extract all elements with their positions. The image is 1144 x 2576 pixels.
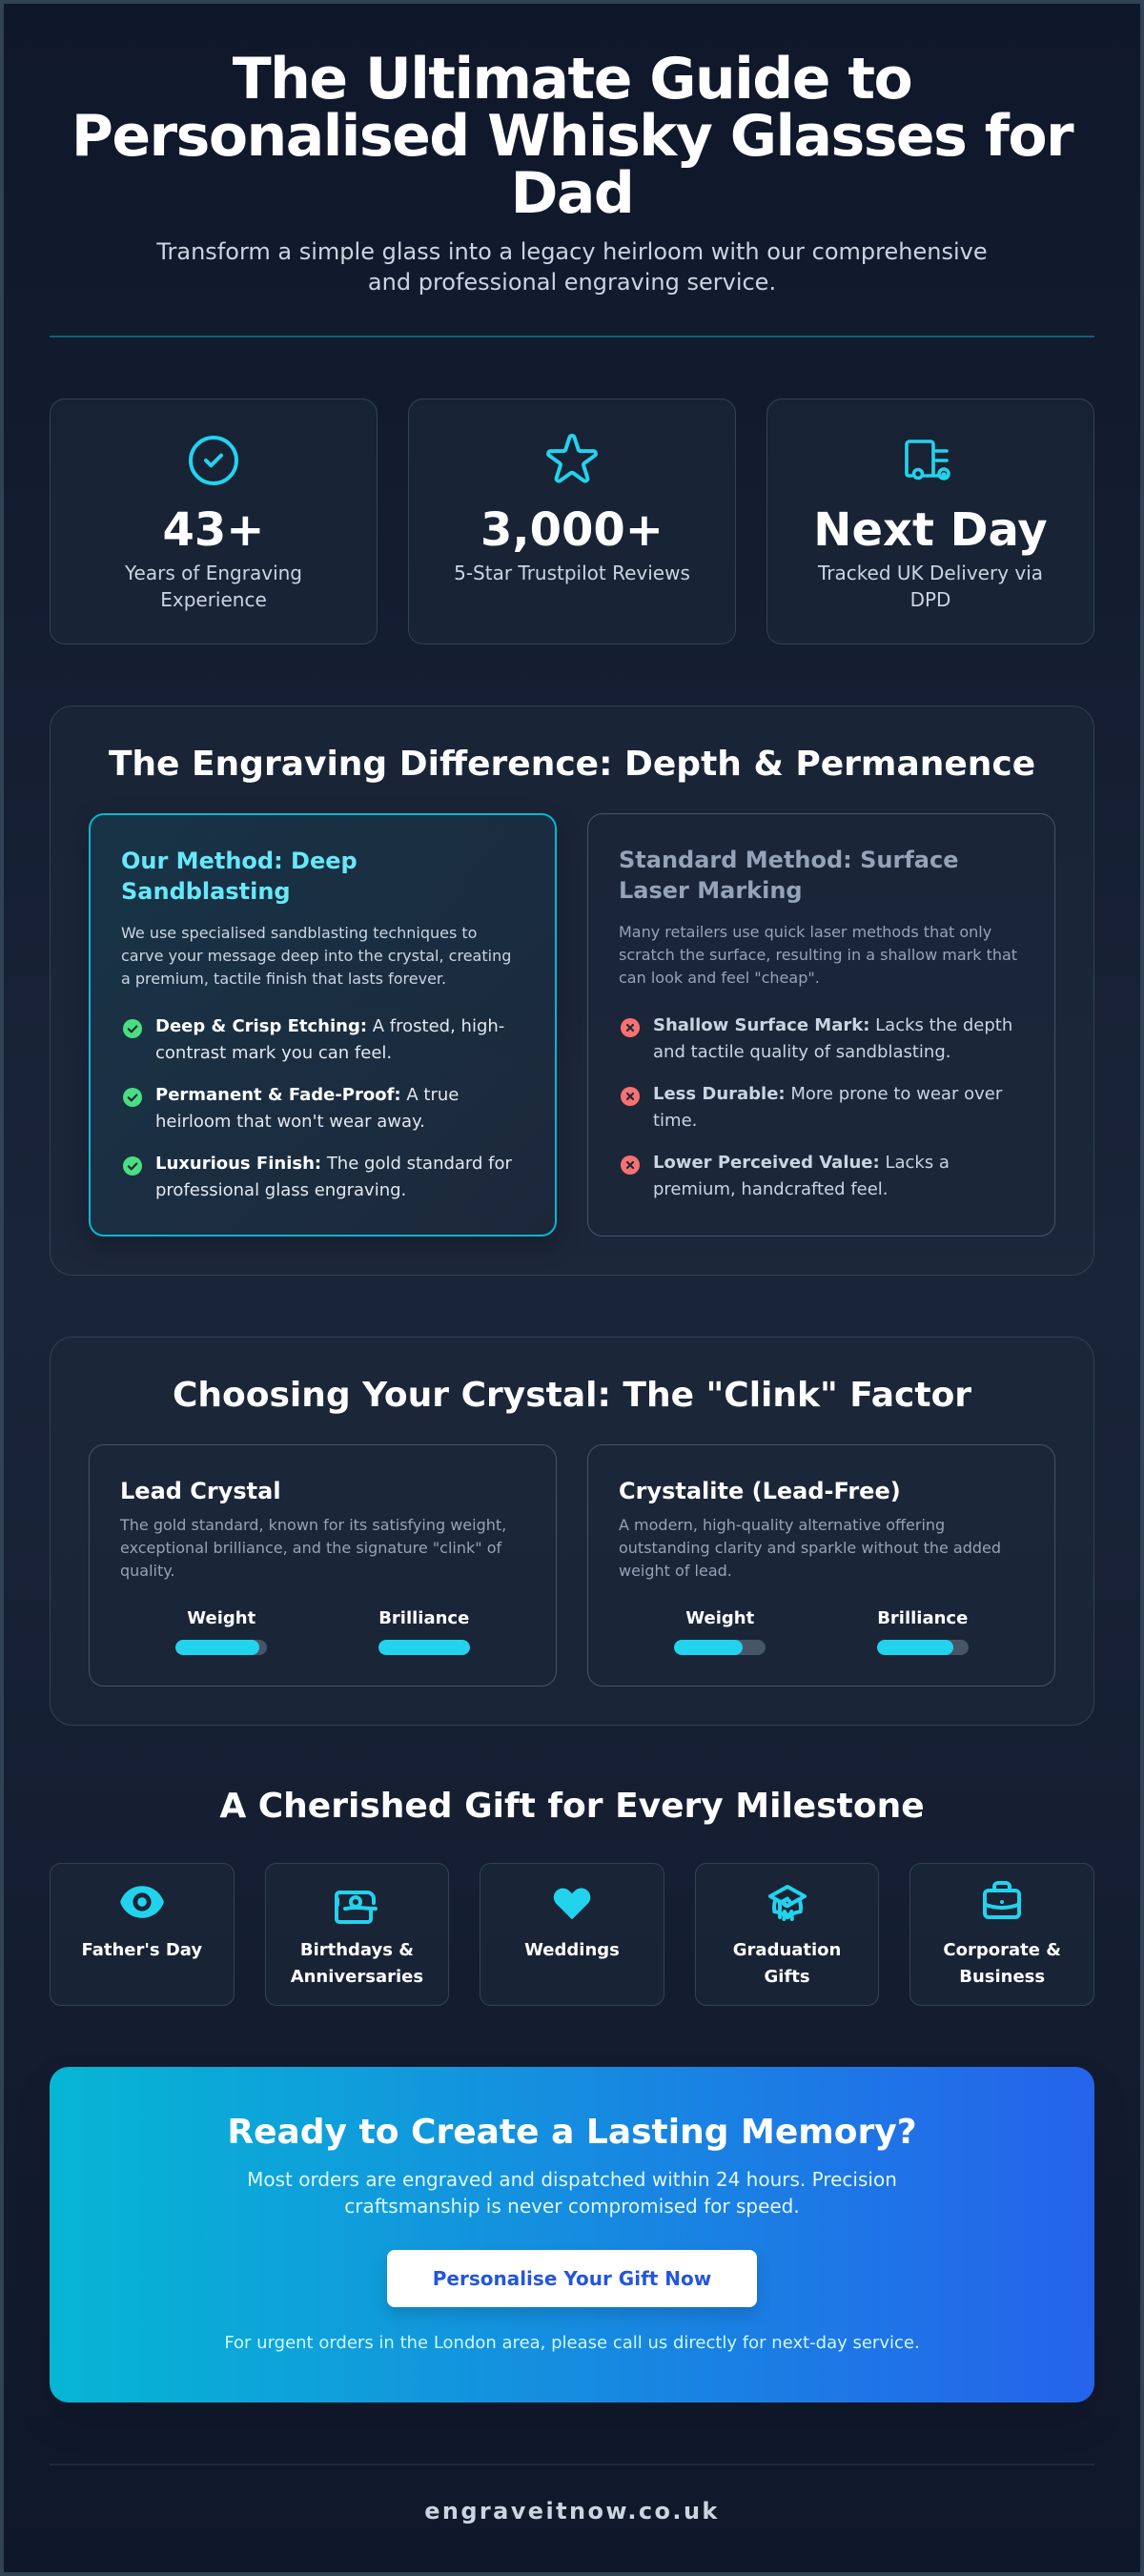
header — [50, 50, 1094, 337]
stat value: Next Day — [813, 503, 1048, 557]
panel: crystal choice — [50, 1337, 1094, 1726]
title: The Ultimate Guide to — [233, 46, 911, 112]
stat label: Tracked UK Delivery via — [818, 562, 1043, 584]
stats row — [50, 399, 1094, 644]
stat label: DPD — [910, 588, 950, 611]
cta note: For urgent orders in the London area, please call us directly for next-day service. — [224, 2333, 920, 2353]
stat card: delivery — [766, 399, 1094, 644]
method description: a premium, tactile finish that lasts forever. — [121, 970, 446, 988]
card: father's day — [50, 1863, 235, 2006]
drawback: value: Lower Perceived Value: Lacks a — [653, 1153, 950, 1173]
crystal description: quality. — [120, 1562, 175, 1580]
card: corporate — [909, 1863, 1094, 2006]
stat label: 5-Star Trustpilot Reviews — [454, 562, 690, 584]
method description: We use specialised sandblasting techniques to — [121, 924, 477, 942]
icon: delivery truck — [905, 440, 950, 480]
weight bar: Weight — [685, 1608, 754, 1628]
brilliance bar — [877, 1608, 969, 1655]
crystal description — [120, 1516, 506, 1580]
method heading — [619, 847, 958, 904]
cta text — [247, 2168, 897, 2218]
crystal description: weight of lead. — [619, 1562, 732, 1580]
method description: Many retailers use quick laser methods that only — [619, 923, 991, 941]
crystal description — [619, 1516, 1001, 1580]
title — [72, 46, 1073, 227]
cta button: Personalise Your Gift Now — [433, 2267, 711, 2290]
benefit: crisp etching: Deep & Crisp Etching: A frosted, high- — [155, 1016, 504, 1036]
method heading — [121, 848, 358, 905]
cta text: craftsmanship is never compromised for speed. — [344, 2195, 800, 2218]
rating bars — [674, 1608, 969, 1655]
card: lead crystal — [89, 1444, 557, 1687]
cta button — [387, 2250, 757, 2307]
method heading: Our Method: Deep — [121, 848, 358, 874]
title: Dad — [511, 160, 633, 227]
stat card: years — [50, 399, 378, 644]
method heading: Laser Marking — [619, 877, 803, 904]
stat label — [818, 562, 1043, 611]
benefit: permanent: heirloom that won't wear away. — [155, 1112, 425, 1132]
icon: briefcase — [982, 1881, 1022, 1919]
drawback: durability: time. — [653, 1111, 697, 1131]
method description — [121, 924, 511, 988]
method description: scratch the surface, resulting in a shallow mark that — [619, 946, 1017, 964]
card: father's day: Father's Day — [81, 1940, 202, 1960]
icon: graduation cap — [768, 1885, 807, 1921]
cta heading: Ready to Create a Lasting Memory? — [227, 2113, 917, 2152]
stat card: reviews — [408, 399, 736, 644]
weight bar — [674, 1608, 766, 1655]
weight bar — [175, 1608, 267, 1655]
icon: album — [335, 1891, 378, 1924]
brilliance bar: Brilliance — [877, 1608, 968, 1628]
method description — [619, 923, 1017, 987]
benefit: crisp etching — [123, 1016, 504, 1063]
icon: check circle — [189, 436, 238, 485]
footer: engraveitnow.co.uk — [424, 2498, 720, 2525]
panel: our method — [89, 813, 557, 1237]
benefit: luxurious: Luxurious Finish: The gold standard for — [155, 1154, 512, 1174]
subtitle: Transform a simple glass into a legacy heirloom with our comprehensive — [156, 238, 988, 265]
rating bars — [175, 1608, 470, 1655]
card: corporate: Business — [959, 1967, 1045, 1987]
drawback: value: premium, handcrafted feel. — [653, 1179, 889, 1199]
crystal description: exceptional brilliance, and the signature "clink" of — [120, 1539, 501, 1557]
icon: eye — [120, 1886, 164, 1918]
benefit: permanent: Permanent & Fade-Proof: A true — [155, 1085, 459, 1105]
benefit: luxurious — [123, 1154, 512, 1200]
stat label: Experience — [160, 588, 267, 611]
drawback: shallow — [621, 1015, 1012, 1062]
card: birthdays: Birthdays & — [300, 1940, 414, 1960]
drawback: durability — [621, 1084, 1003, 1131]
icon: star — [546, 434, 598, 483]
card: graduation: Gifts — [765, 1967, 810, 1987]
weight bar: Weight — [187, 1608, 255, 1628]
panel: engraving difference — [50, 705, 1094, 1276]
method description: carve your message deep into the crystal, creating — [121, 947, 511, 965]
panel: call to action — [50, 2067, 1094, 2402]
crystal description: outstanding clarity and sparkle without the added — [619, 1539, 1001, 1557]
card: weddings — [480, 1863, 664, 2006]
method description: can look and feel "cheap". — [619, 969, 820, 987]
card: graduation: Graduation — [733, 1940, 841, 1960]
crystal description: The gold standard, known for its satisfying weight, — [120, 1516, 506, 1534]
card: crystalite — [587, 1444, 1055, 1687]
drawback: value — [621, 1153, 950, 1199]
method heading: Standard Method: Surface — [619, 847, 958, 873]
subtitle: and professional engraving service. — [368, 269, 776, 296]
crystal description: A modern, high-quality alternative offering — [619, 1516, 945, 1534]
drawbacks list — [621, 1015, 1012, 1199]
panel: standard method — [587, 813, 1055, 1237]
subtitle — [156, 238, 988, 296]
stat value: 3,000+ — [480, 503, 664, 557]
milestone cards — [50, 1863, 1094, 2006]
stat label — [125, 562, 302, 611]
card: birthdays — [265, 1863, 449, 2006]
crystal name: Lead Crystal — [120, 1478, 281, 1504]
drawback: shallow: Shallow Surface Mark: Lacks the depth — [653, 1015, 1012, 1035]
stat label: Years of Engraving — [125, 562, 302, 584]
cta text: Most orders are engraved and dispatched within 24 hours. Precision — [247, 2168, 897, 2191]
card: corporate: Corporate & — [943, 1940, 1061, 1960]
card: birthdays: Anniversaries — [291, 1967, 423, 1987]
benefit: crisp etching: contrast mark you can feel. — [155, 1043, 392, 1063]
method heading: Sandblasting — [121, 878, 291, 905]
heading: The Engraving Difference: Depth & Permanence — [109, 745, 1035, 784]
brilliance bar — [378, 1608, 470, 1655]
footer — [50, 2464, 1094, 2526]
drawback: shallow: and tactile quality of sandblasting. — [653, 1042, 951, 1062]
brilliance bar: Brilliance — [378, 1608, 469, 1628]
heading: Choosing Your Crystal: The "Clink" Factor — [173, 1376, 971, 1415]
icon: heart — [553, 1888, 591, 1920]
crystal name: Crystalite (Lead-Free) — [619, 1478, 901, 1504]
title: Personalised Whisky Glasses for — [72, 103, 1072, 170]
drawback: durability: Less Durable: More prone to wear over — [653, 1084, 1002, 1104]
card: weddings: Weddings — [524, 1940, 620, 1960]
heading: milestones: A Cherished Gift for Every Milestone — [219, 1787, 925, 1826]
benefit: permanent — [123, 1085, 459, 1132]
benefit: luxurious: professional glass engraving. — [155, 1180, 406, 1200]
stat value: 43+ — [162, 503, 265, 557]
benefits list — [123, 1016, 512, 1200]
card: graduation — [695, 1863, 879, 2006]
